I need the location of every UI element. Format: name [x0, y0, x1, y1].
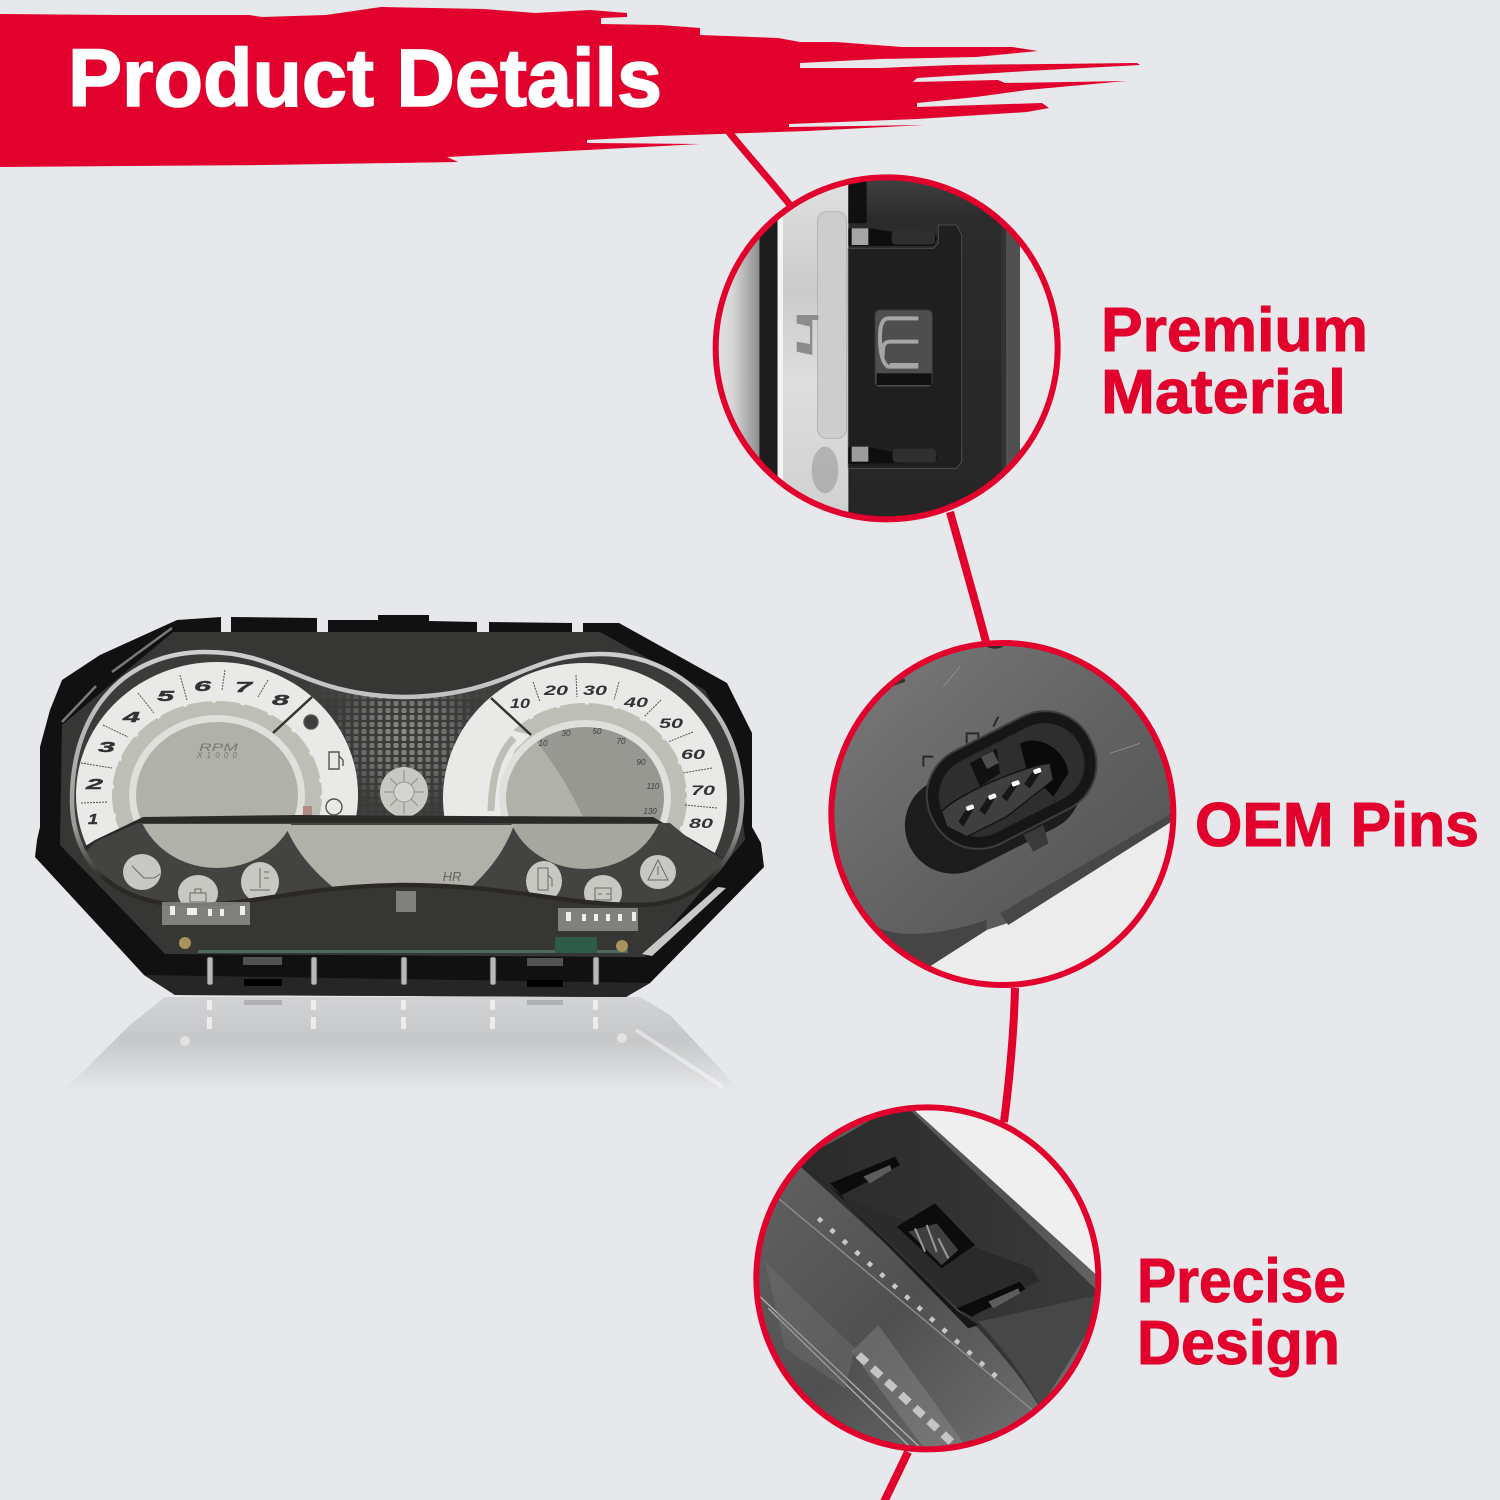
housing vents: [243, 957, 563, 966]
speed scale numbers: 10: [510, 695, 530, 711]
fuel gauge icons: [304, 715, 343, 815]
inner speed numbers: 130: [643, 807, 657, 816]
label: Precise Design: Precise: [1137, 1247, 1346, 1316]
housing: [35, 615, 764, 997]
center emblem: [380, 767, 428, 817]
speed scale numbers: 20: [542, 682, 568, 698]
warning indicator icons: [132, 860, 668, 902]
RPM scale numbers: 1: [88, 811, 98, 828]
product: gauge cluster: [35, 615, 764, 997]
label: Premium Material: [1101, 296, 1368, 427]
label: Premium Material: Premium: [1101, 296, 1368, 365]
RPM label: [197, 744, 238, 758]
label: Premium Material: Material: [1101, 358, 1346, 427]
right dial: [443, 663, 727, 853]
center dot texture: [334, 694, 474, 804]
inner speed numbers: 10: [539, 739, 548, 748]
dial face inside lens: [76, 662, 740, 903]
inner speed numbers: [539, 727, 660, 816]
RPM label: RPM: [199, 742, 239, 754]
speed scale numbers: 50: [659, 715, 683, 731]
clear tabs: [162, 891, 638, 931]
RPM label: X1000: [196, 751, 238, 760]
PCB strip: [179, 937, 628, 953]
upper window: [310, 640, 500, 700]
inner speed numbers: 110: [647, 782, 660, 791]
housing highlights: [62, 628, 172, 722]
speed scale numbers: 70: [691, 782, 715, 798]
speed scale numbers: 60: [681, 746, 705, 762]
RPM scale numbers: 5: [157, 688, 175, 705]
label: Precise Design: Design: [1137, 1309, 1340, 1378]
left dial: [76, 662, 358, 846]
product reflection: [51, 997, 752, 1103]
RPM scale numbers: [84, 678, 290, 828]
RPM scale numbers: 2: [84, 776, 104, 793]
inner speed numbers: 50: [593, 727, 602, 736]
right dial separator and tick marks: [491, 675, 717, 808]
housing pins: [207, 957, 599, 985]
RPM scale numbers: 8: [272, 692, 290, 709]
speed scale numbers: 80: [689, 815, 713, 831]
RPM scale numbers: 7: [235, 679, 253, 696]
dark band and lower panel: [84, 815, 724, 859]
lens rim: [72, 652, 742, 905]
lower housing step: [144, 975, 650, 997]
clear cover: [60, 632, 745, 957]
speed scale numbers: 30: [583, 682, 607, 698]
housing slots: [244, 979, 563, 987]
connector line: OEM pins to precise design: [1004, 988, 1015, 1122]
label: Precise Design: [1137, 1247, 1346, 1378]
RPM scale numbers: 4: [121, 709, 141, 726]
warning indicators: [123, 854, 676, 903]
HR label: HR: [443, 869, 461, 884]
speed scale numbers: [510, 682, 715, 831]
clear tab contacts: [170, 906, 636, 921]
title: Product Details: [68, 33, 662, 124]
lower LCD segments: [142, 824, 658, 887]
RPM scale numbers: 3: [98, 739, 116, 756]
label: OEM Pins: OEM Pins: [1195, 791, 1479, 860]
left dial separator and tick marks: [81, 670, 312, 803]
inner speed numbers: 30: [562, 729, 571, 738]
detail circle: precise design: [753, 1104, 1102, 1452]
speed scale numbers: 40: [622, 694, 648, 710]
clear cover right highlight: [642, 887, 726, 956]
connector line: banner to premium material: [728, 131, 790, 205]
detail circle: premium material: [712, 174, 1061, 522]
inner speed numbers: 70: [617, 737, 626, 746]
inner speed numbers: 90: [637, 758, 646, 767]
connector line: premium material to OEM pins: [950, 512, 986, 642]
connector line: precise design to page bottom: [884, 1452, 908, 1500]
detail circle: OEM pins: [820, 630, 1190, 985]
red brush banner: [0, 7, 1140, 167]
RPM scale numbers: 6: [194, 678, 212, 695]
